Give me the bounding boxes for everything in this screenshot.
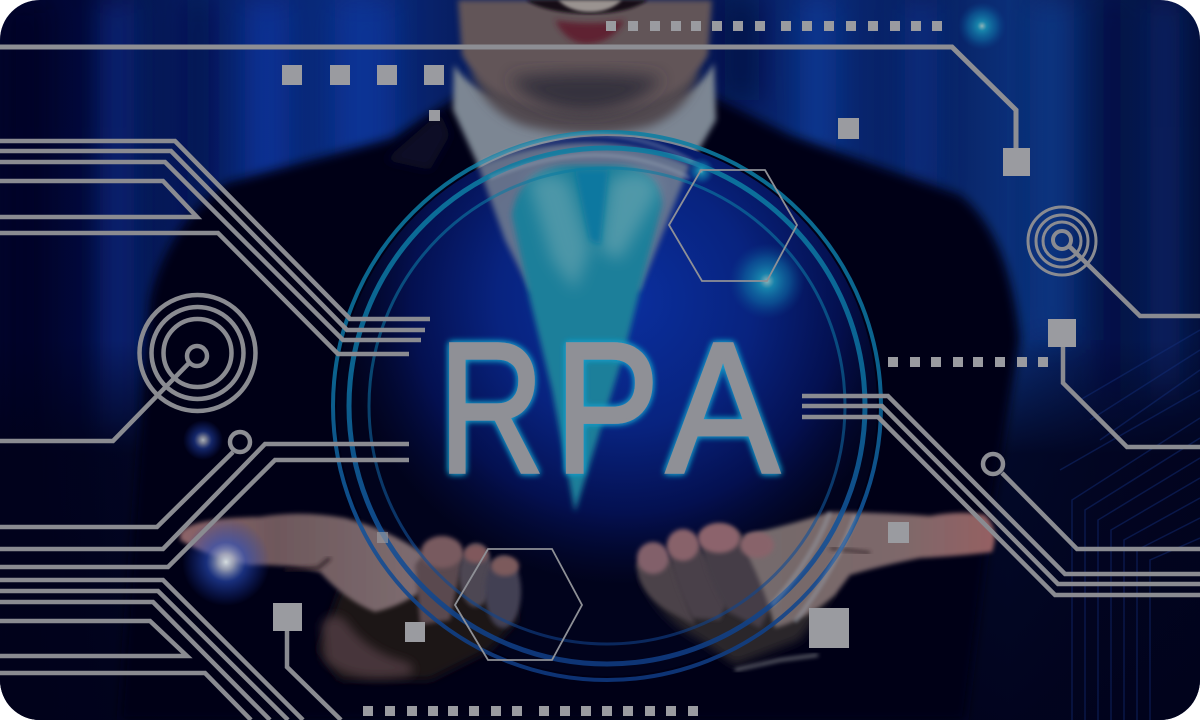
circuit lines: top right bbox=[0, 47, 1016, 150]
lower palm bbox=[322, 616, 413, 678]
hand: left bbox=[180, 514, 521, 680]
lens flares bbox=[182, 2, 1006, 606]
photo: man in suit bbox=[120, 0, 1020, 720]
circuit lines: left middle bbox=[0, 362, 409, 567]
neck shadow bbox=[470, 70, 700, 134]
dotted line: top bbox=[606, 21, 942, 31]
hologram rings bbox=[333, 132, 881, 680]
lapel left highlight bbox=[391, 116, 448, 168]
crease bbox=[285, 558, 330, 570]
ring highlight across right hand bbox=[772, 512, 855, 622]
square markers bbox=[273, 65, 1076, 648]
suit jacket bbox=[120, 98, 1020, 720]
hologram: glowing blue orb bbox=[347, 136, 877, 580]
teeth bbox=[558, 0, 622, 12]
heading: RPA: A bbox=[666, 304, 780, 512]
hexagon outlines bbox=[455, 170, 797, 660]
watch highlight bbox=[735, 655, 818, 670]
heading: RPA: P bbox=[554, 304, 659, 512]
circuit texture: faint lines lower right bbox=[1060, 330, 1200, 720]
tie centre shade bbox=[575, 170, 608, 245]
heading: RPA: R bbox=[438, 304, 544, 512]
lip bbox=[555, 20, 625, 44]
face and chin bbox=[458, 0, 712, 114]
dotted line: bottom bbox=[363, 706, 698, 716]
dark palm bbox=[643, 588, 833, 666]
dotted line: right bbox=[888, 357, 1048, 367]
mouth bbox=[526, 0, 648, 14]
fingers bbox=[415, 545, 464, 625]
fingers bbox=[636, 554, 695, 625]
fingertips bbox=[637, 542, 669, 574]
circuit lines: left lower bundle bbox=[0, 580, 341, 720]
collar over orb bbox=[478, 142, 690, 290]
back of hand and finger bbox=[745, 512, 995, 628]
heading: RPA bbox=[438, 304, 780, 512]
shirt collar bbox=[449, 62, 720, 170]
circuit lines: right bbox=[802, 245, 1200, 595]
beard shadow bbox=[510, 73, 662, 112]
ring highlight across collar bbox=[478, 135, 698, 178]
shirt pale patches bbox=[528, 174, 590, 290]
crease bbox=[830, 548, 870, 553]
icon: circuit nodes bbox=[230, 432, 1003, 474]
circuit lines: left upper bundle bbox=[0, 141, 430, 354]
icon: target left bbox=[140, 295, 256, 411]
icon: target right bbox=[1028, 207, 1096, 275]
finger and back of hand bbox=[180, 514, 430, 612]
dark palm bbox=[316, 580, 520, 683]
tie knot bbox=[512, 165, 662, 512]
hand: right bbox=[636, 512, 995, 670]
